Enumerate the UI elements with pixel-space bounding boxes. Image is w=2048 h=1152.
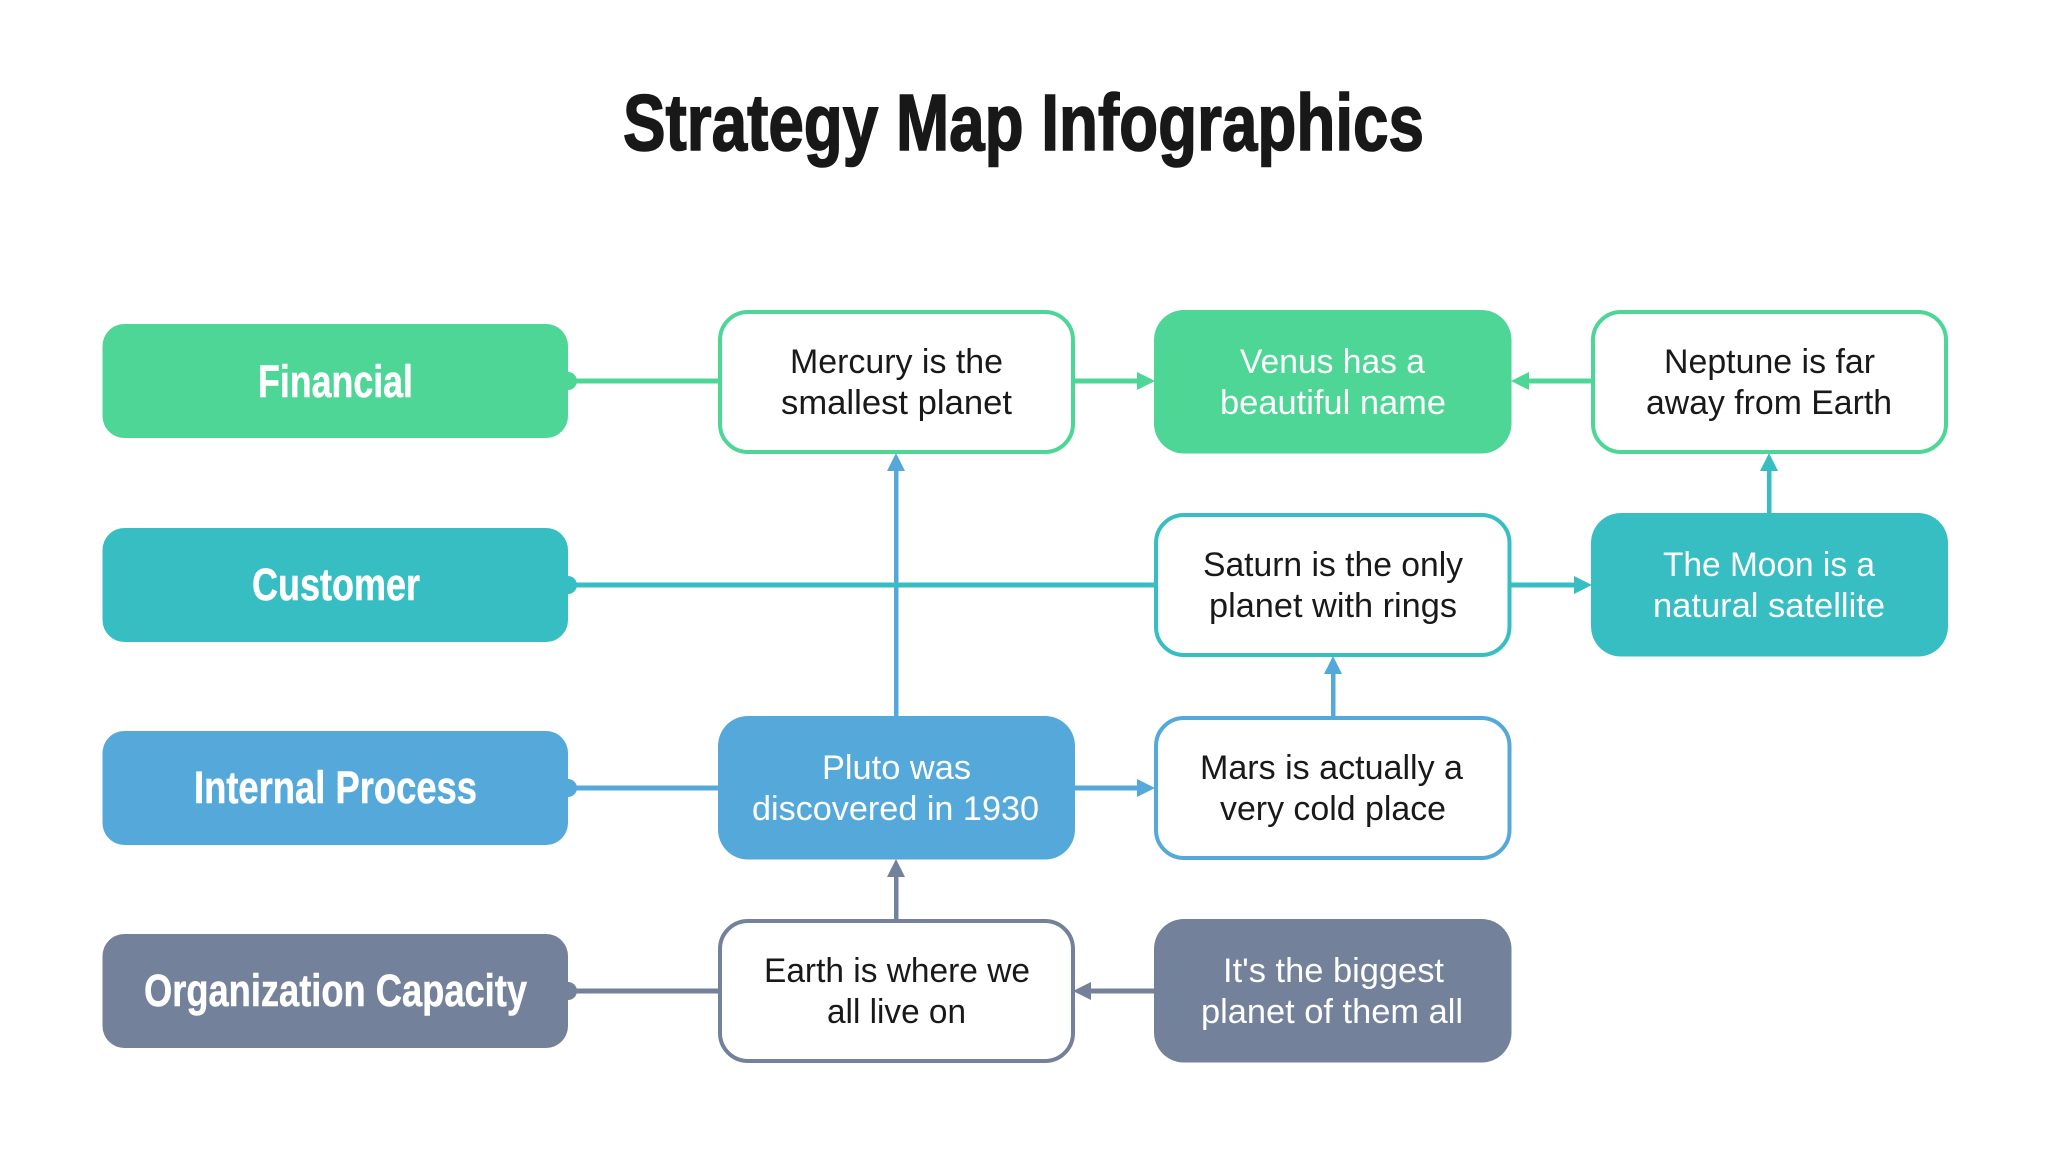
arrow: Neptune to Venus [1511, 372, 1592, 390]
node: Pluto [718, 716, 1075, 860]
connector: Financial to Mercury [559, 372, 718, 390]
arrow: Pluto to Mars [1074, 779, 1155, 797]
node: Mercury: Mercury is the [790, 343, 1003, 381]
node: Jupiter [1154, 919, 1512, 1062]
node: Mercury: smallest planet [781, 384, 1013, 422]
panel: Organization Capacity label: Organization Capacity [144, 965, 527, 1016]
panel: Customer label [102, 528, 568, 642]
node: Earth: Earth is where we [764, 952, 1030, 990]
node: Venus [1154, 310, 1512, 454]
node: Jupiter: planet of them all [1201, 993, 1463, 1031]
arrow: Mercury to Venus [1073, 372, 1155, 390]
node: Earth: all live on [827, 993, 966, 1031]
connector: Internal Process to Pluto [559, 779, 718, 797]
node: Venus: Venus has a [1240, 343, 1425, 381]
panel: Organization Capacity label [102, 934, 568, 1048]
connector: Organization Capacity to Earth [559, 982, 718, 1000]
arrow: Earth to Pluto [887, 859, 905, 920]
node: Mercury [720, 312, 1073, 452]
node: Venus: beautiful name [1220, 384, 1446, 422]
node: Neptune [1593, 312, 1946, 452]
arrow: Jupiter to Earth [1073, 982, 1155, 1000]
node: Saturn [1156, 515, 1510, 655]
node: Mars: Mars is actually a [1200, 749, 1463, 787]
connector: Customer to Saturn [559, 576, 1154, 594]
arrow: Moon to Neptune [1760, 453, 1778, 514]
arrow: Saturn to Moon [1511, 576, 1592, 594]
panel: Internal Process label [102, 731, 568, 845]
node: Moon: natural satellite [1653, 587, 1885, 625]
node: Pluto: Pluto was [822, 749, 971, 787]
node: Moon [1591, 513, 1948, 656]
panel: Financial label: Financial [258, 356, 413, 407]
node: Neptune: away from Earth [1646, 384, 1892, 422]
node: Saturn: Saturn is the only [1203, 546, 1463, 584]
panel: Financial label [102, 324, 568, 438]
node: Mars: very cold place [1220, 790, 1446, 828]
node: Saturn: planet with rings [1209, 587, 1457, 625]
node: Neptune: Neptune is far [1664, 343, 1875, 381]
title: Strategy Map Infographics [623, 78, 1424, 167]
node: Pluto: discovered in 1930 [752, 790, 1039, 828]
node: Earth [720, 921, 1073, 1061]
panel: Customer label: Customer [252, 559, 420, 610]
panel: Internal Process label: Internal Process [194, 762, 477, 813]
node: Mars [1156, 718, 1510, 858]
arrow: Pluto to Mercury [887, 453, 905, 716]
arrow: Mars to Saturn [1324, 656, 1342, 717]
node: Jupiter: It's the biggest [1223, 952, 1445, 990]
node: Moon: The Moon is a [1663, 546, 1875, 584]
